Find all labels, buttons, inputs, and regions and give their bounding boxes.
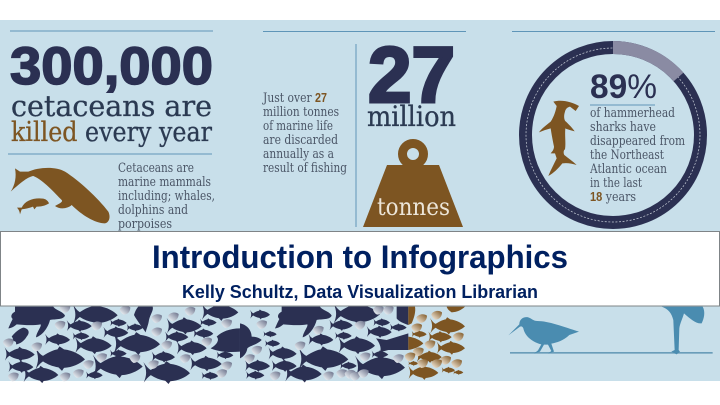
text: hammerhead description: of hammerhead <box>590 106 675 121</box>
panel: school of fish pattern <box>3 302 465 384</box>
subheading: million: million <box>367 100 456 133</box>
text: cetaceans description: Cetaceans are <box>118 161 194 176</box>
panel: hammerhead sharks statistic <box>512 31 715 222</box>
icon: small shaded brown fish <box>405 311 464 368</box>
icon: small grey fish, left <box>3 304 232 381</box>
heading: 27: 27 <box>368 30 455 119</box>
icon: weight labelled tonnes <box>363 144 463 227</box>
text: hammerhead description: disappeared from <box>590 134 685 149</box>
text: discarded marine life description: annually as a <box>263 147 334 162</box>
text: cetaceans description: porpoises <box>118 217 172 232</box>
panel: cetaceans statistic <box>8 30 215 232</box>
title: Introduction to Infographics <box>152 239 568 275</box>
heading: 89%: 89% <box>590 68 657 106</box>
text: discarded marine life description: million tonnes <box>263 105 339 120</box>
icon: hammerhead shark <box>539 101 579 176</box>
title banner <box>0 232 720 306</box>
panel: 27 million tonnes statistic <box>261 30 466 227</box>
icon: dark tuna school, left <box>5 303 240 384</box>
icon: brown fish strip <box>408 307 465 380</box>
chart: 89 percent ring <box>526 48 700 222</box>
subheading: cetaceans are killed every year: killed every year <box>11 117 212 148</box>
text: hammerhead description: the Northeast <box>590 148 665 163</box>
text: cetaceans description <box>118 161 215 232</box>
text: discarded marine life description: of marine life <box>263 119 333 134</box>
heading: 300,000: 300,000 <box>10 37 213 96</box>
text: hammerhead description: Atlantic ocean <box>589 162 668 177</box>
text: hammerhead description: sharks have <box>590 120 656 135</box>
icon: weight labelled tonnes: tonnes <box>377 193 450 221</box>
icon: wading bird <box>508 317 579 354</box>
text: cetaceans description: dolphins and <box>118 203 188 218</box>
text: cetaceans description: including; whales, <box>118 189 215 204</box>
icon: dark tuna school, right <box>240 302 408 382</box>
icon: whale and calf <box>11 168 110 223</box>
text: hammerhead description: 18 years <box>590 189 636 205</box>
subtitle: Kelly Schultz, Data Visualization Librarian <box>182 281 538 302</box>
text: discarded marine life description: Just over 27 <box>261 90 327 106</box>
panel: shore birds <box>508 307 713 354</box>
icon: small grey fish, right <box>244 306 404 381</box>
icon: standing heron <box>662 307 704 354</box>
text: hammerhead description <box>589 106 685 205</box>
subheading: cetaceans are killed every year <box>11 89 212 148</box>
subheading: cetaceans are killed every year: cetaceans are <box>11 89 212 123</box>
text: discarded marine life description: result of fishing <box>263 161 347 176</box>
text: discarded marine life description <box>261 90 347 176</box>
text: cetaceans description: marine mammals <box>118 175 211 190</box>
text: discarded marine life description: are discarded <box>263 133 338 148</box>
text: hammerhead description: in the last <box>590 176 643 191</box>
